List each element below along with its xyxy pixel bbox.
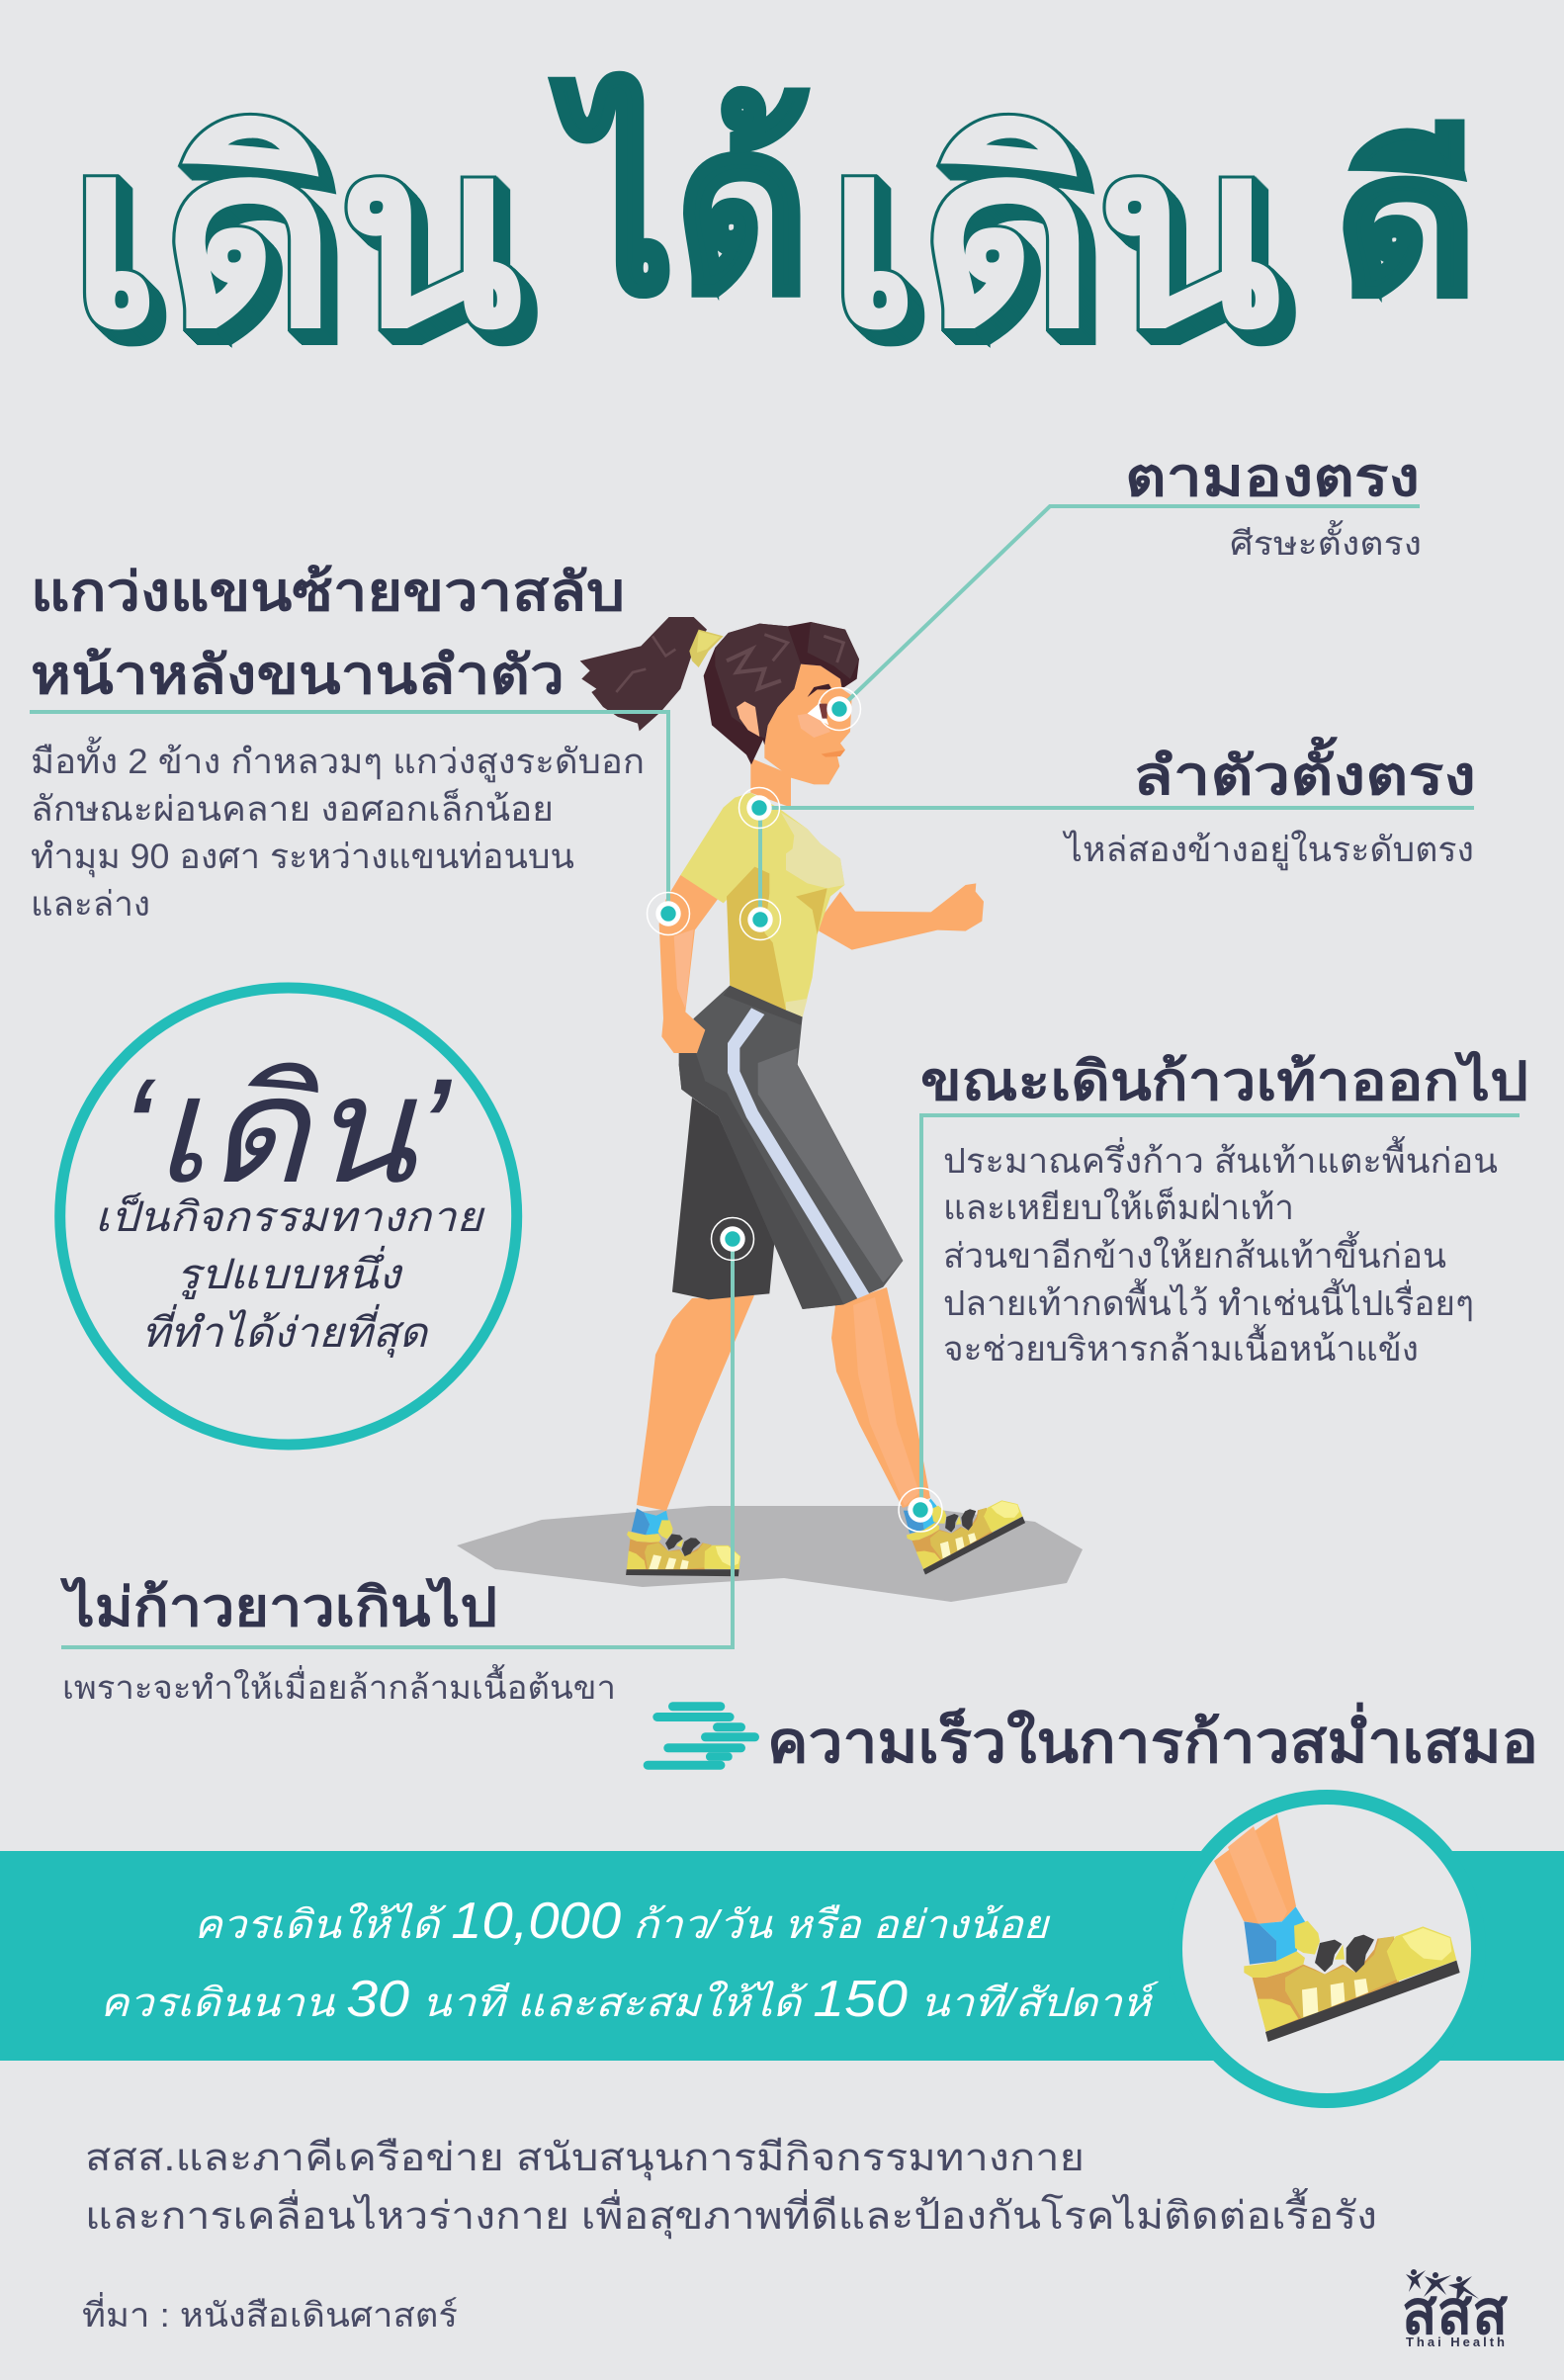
callout: arm swing: แกว่งแขนซ้ายขวาสลับ <box>31 563 625 622</box>
figure: walking woman <box>580 617 1030 1612</box>
callout circle: walking: ‘เดิน’ <box>119 1047 453 1213</box>
title: ได้ <box>551 73 811 341</box>
icon: speed lines <box>644 1702 759 1770</box>
title: ดี <box>1335 115 1478 335</box>
band text: ควรเดินให้ได้ 10,000 ก้าว/วัน หรือ อย่างน้อย <box>194 1893 1051 1950</box>
title: เดิน <box>68 93 524 379</box>
callout: eyes straight <box>1125 448 1422 562</box>
back arm <box>659 875 719 1053</box>
footer text <box>85 2137 1377 2240</box>
front arm <box>818 883 984 950</box>
callout: arm swing: มือทั้ง 2 ข้าง กำหลวมๆ แกว่งสูงระดับอก <box>31 736 645 782</box>
logo figures <box>1406 2269 1479 2302</box>
source: ที่มา : หนังสือเดินศาสตร์ <box>82 2292 458 2335</box>
teal band <box>0 1851 1564 2061</box>
callout: stepping: ขณะเดินก้าวเท้าออกไป <box>920 1050 1528 1111</box>
left shoe <box>614 1501 751 1612</box>
callout: eyes straight: ศีรษะตั้งตรง <box>1230 520 1422 562</box>
band text <box>100 1893 1160 2028</box>
callout: stepping: ประมาณครึ่งก้าว ส้นเท้าแตะพื้นก่อน <box>943 1135 1498 1181</box>
callout: stepping: จะช่วยบริหารกล้ามเนื้อหน้าแข้ง <box>943 1323 1419 1368</box>
callout: arm swing: ทำมุม 90 องศา ระหว่างแขนท่อนบน <box>31 837 574 877</box>
callout: upright torso: ลำตัวตั้งตรง <box>1133 737 1476 806</box>
title <box>68 73 1478 379</box>
callout: stepping: และเหยียบให้เต็มฝ่าเท้า <box>943 1187 1294 1227</box>
ground shadow <box>457 1506 1083 1602</box>
logo: Thai Health: Thai Health <box>1406 2335 1505 2349</box>
band text: ควรเดินนาน 30 นาที และสะสมให้ได้ 150 นาที/สัปดาห์ <box>100 1971 1160 2028</box>
logo: Thai Health: สสส <box>1402 2279 1508 2347</box>
callout: arm swing: และล่าง <box>31 885 150 924</box>
right shoe <box>903 1487 1030 1576</box>
callout: arm swing <box>31 563 645 924</box>
callout: stepping: ปลายเท้ากดพื้นไว้ ทำเช่นนี้ไปเรื่อยๆ <box>943 1278 1474 1323</box>
connector lines <box>30 506 1520 1647</box>
callout: upright torso: ไหล่สองข้างอยู่ในระดับตรง <box>1062 830 1474 870</box>
head and ponytail <box>580 617 859 808</box>
callout: short steps <box>60 1576 616 1706</box>
callout: stepping: ส่วนขาอีกข้างให้ยกส้นเท้าขึ้นก่อน <box>943 1230 1446 1276</box>
callout: upright torso <box>1062 737 1476 870</box>
circle: shoe detail <box>1174 1798 1479 2100</box>
callout: short steps: เพราะจะทำให้เมื่อยล้ากล้ามเนื้อต้นขา <box>62 1664 616 1706</box>
shirt <box>680 793 844 1016</box>
callout circle: walking: เป็นกิจกรรมทางกาย <box>95 1192 485 1240</box>
callout circle: walking: รูปแบบหนึ่ง <box>176 1245 403 1299</box>
heading: steady pace: ความเร็วในการก้าวสม่ำเสมอ <box>767 1702 1538 1775</box>
title: เดิน <box>826 93 1282 379</box>
footer text: สสส.และภาคีเครือข่าย สนับสนุนการมีกิจกรรมทางกาย <box>85 2137 1085 2181</box>
hotspots <box>647 688 942 1532</box>
callout circle: walking: ที่ทำได้ง่ายที่สุด <box>141 1303 430 1358</box>
callout: arm swing: หน้าหลังขนานลำตัว <box>31 646 565 705</box>
callout circle: walking <box>60 988 517 1445</box>
legs <box>637 1287 930 1511</box>
shorts <box>672 986 903 1309</box>
footer text: และการเคลื่อนไหวร่างกาย เพื่อสุขภาพที่ดีและป้องกันโรคไม่ติดต่อเรื้อรัง <box>85 2187 1377 2240</box>
callout: arm swing: ลักษณะผ่อนคลาย งอศอกเล็กน้อย <box>31 788 554 829</box>
callout: short steps: ไม่ก้าวยาวเกินไป <box>60 1576 497 1637</box>
callout: eyes straight: ตามองตรง <box>1125 448 1420 507</box>
callout: stepping <box>920 1050 1528 1368</box>
